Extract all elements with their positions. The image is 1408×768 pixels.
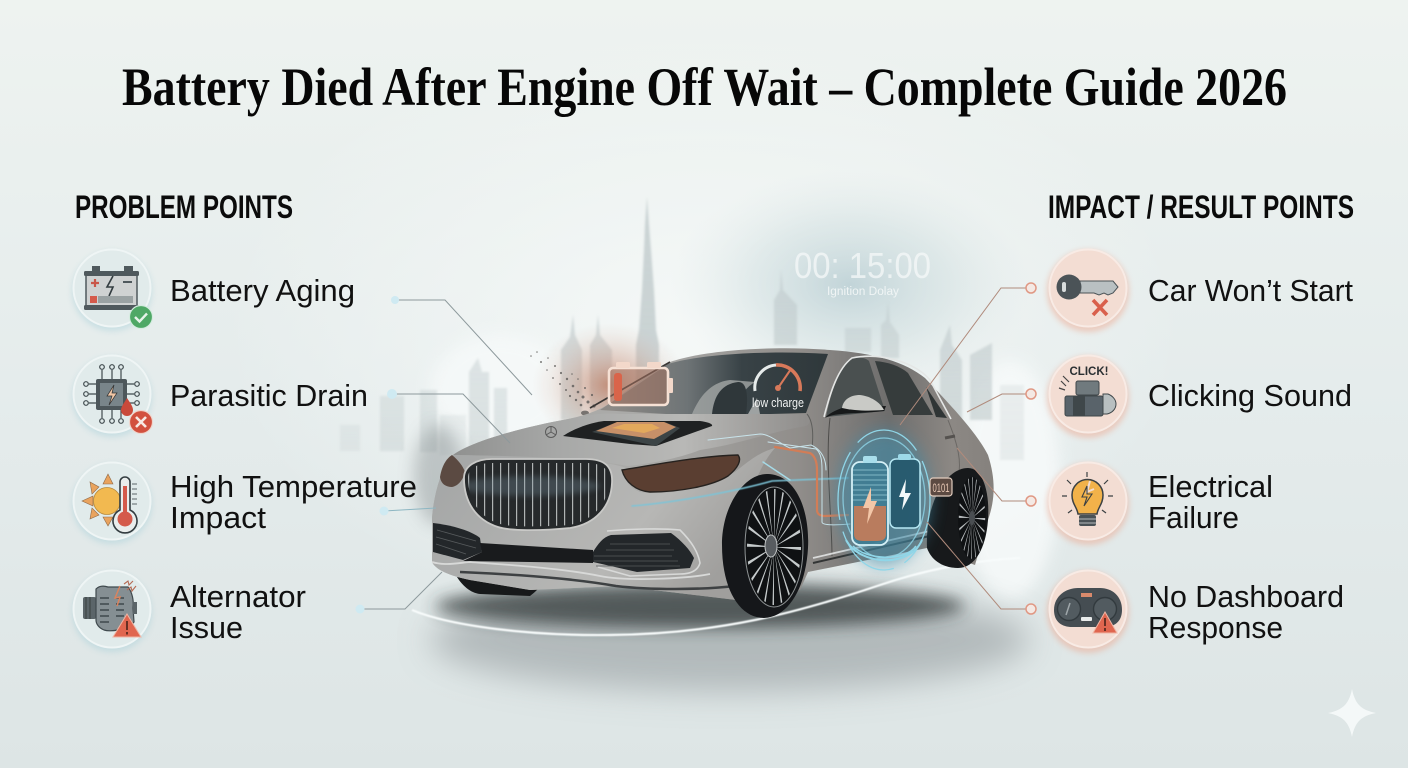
disintegrating particles — [530, 351, 596, 415]
label — [1148, 469, 1273, 535]
floor reflection — [430, 588, 1030, 692]
orange smoke behind battery warning — [532, 323, 688, 447]
front fascia — [432, 448, 775, 600]
hood — [453, 413, 810, 466]
label: Response — [1148, 610, 1283, 645]
low charge gauge — [752, 365, 804, 410]
impact 4: no dashboard response — [1047, 570, 1344, 653]
dark fog behind left fender — [414, 425, 462, 525]
lower bumper intakes — [432, 523, 735, 589]
front underside shadow — [457, 577, 543, 596]
city skyline — [340, 197, 1024, 460]
label: Impact — [170, 500, 266, 535]
problem 3: high temperature — [72, 462, 417, 544]
side digital badge — [930, 478, 952, 496]
star emblem — [546, 426, 556, 438]
impact 2: clicking sound — [1047, 356, 1352, 438]
label — [1148, 579, 1344, 645]
icon: dead dashboard — [1047, 570, 1129, 653]
impact 1: car wont start — [1047, 250, 1353, 332]
car body — [432, 348, 994, 600]
low charge gauge: low charge — [752, 395, 804, 410]
side mirror — [825, 395, 886, 418]
right connector lines — [900, 283, 1036, 614]
label: Electrical — [1148, 469, 1273, 504]
icon: chip with drain — [72, 356, 152, 437]
icon: starter motor click: CLICK! — [1070, 366, 1108, 378]
open hood bay with battery — [563, 421, 712, 446]
label: Car Won’t Start — [1148, 273, 1353, 308]
label: Issue — [170, 610, 243, 645]
hologram batteries — [837, 430, 931, 570]
icon: broken bulb — [1047, 462, 1129, 545]
ignition delay timer: Ignition Dolay — [827, 286, 899, 298]
icon: sun and thermometer — [72, 462, 152, 544]
windshield — [600, 352, 828, 416]
car — [432, 348, 994, 618]
panel: impact points — [1047, 250, 1353, 653]
label: Parasitic Drain — [170, 378, 368, 413]
side windows — [824, 356, 951, 419]
headlight — [622, 455, 740, 492]
front grille — [460, 459, 612, 530]
side digital badge: 0101 — [932, 481, 950, 495]
label — [170, 579, 306, 645]
cabin seats — [692, 380, 760, 414]
ignition delay timer: 00: 15:00 — [794, 245, 931, 286]
front wheel — [722, 474, 808, 618]
problem 4: alternator — [72, 570, 306, 652]
label: High Temperature — [170, 469, 417, 504]
left headlight — [440, 455, 465, 487]
icon: sparkle watermark — [1328, 689, 1376, 737]
door lines and sill — [807, 414, 960, 563]
label — [170, 469, 417, 535]
label: Battery Aging — [170, 273, 355, 308]
panel: problem points — [72, 250, 417, 652]
icon: key with x — [1047, 250, 1129, 332]
icon: starter motor click — [1047, 356, 1129, 438]
label: No Dashboard — [1148, 579, 1344, 614]
hologram circuit traces — [632, 434, 850, 525]
label: Alternator — [170, 579, 306, 614]
problem 2: parasitic drain — [72, 356, 368, 437]
floor light ring — [412, 558, 1020, 635]
low battery warning icon — [590, 362, 673, 408]
impact 3: electrical failure — [1047, 462, 1273, 545]
left connector lines — [356, 296, 532, 614]
icon: aging battery — [72, 250, 152, 331]
car shadow — [435, 584, 965, 628]
rear wheel — [927, 468, 988, 568]
problem 1: battery aging — [72, 250, 355, 331]
icon: alternator warning — [72, 570, 152, 652]
label: Clicking Sound — [1148, 378, 1352, 413]
label: Failure — [1148, 500, 1239, 535]
heading: problem points: PROBLEM POINTS — [75, 189, 293, 225]
